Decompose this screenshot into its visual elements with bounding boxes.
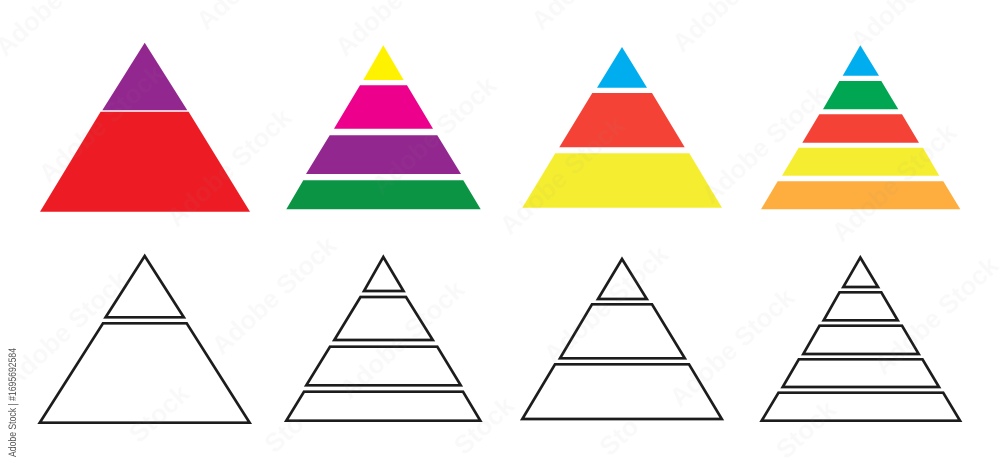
tier outline: first — [843, 258, 878, 287]
watermark pattern: Stock — [448, 390, 520, 461]
tier: purple — [102, 43, 187, 110]
watermark pattern: Adobe Stock — [826, 117, 963, 248]
watermark pattern: Stock — [123, 378, 195, 449]
tier: red — [40, 112, 250, 212]
tier: green — [823, 81, 898, 109]
tier: purple — [306, 135, 461, 174]
panel: colored pyramid, five tiers — [761, 45, 960, 209]
tier outline: second — [824, 292, 898, 320]
tier: orange — [761, 181, 960, 209]
tier: yellow — [522, 153, 722, 208]
watermark pattern: Adobe Stock — [538, 239, 675, 370]
watermark pattern: Adobe Stock — [334, 274, 471, 405]
stock image id caption: Adobe Stock | #1695692584 — [7, 348, 19, 457]
tier: red — [559, 93, 685, 147]
tier: blue — [843, 45, 879, 76]
watermark pattern: Sto — [258, 408, 309, 459]
watermark pattern: Sto — [593, 411, 644, 462]
panel: colored pyramid, two tiers — [40, 43, 250, 212]
tier: blue — [597, 47, 647, 88]
panel: colored pyramid, three tiers — [522, 47, 722, 208]
panel: outline pyramid, five tiers — [762, 258, 960, 421]
tier: magenta — [334, 85, 433, 129]
watermark pattern: Adobe Stock — [206, 230, 343, 361]
tier outline: second — [334, 297, 433, 340]
tier outline: bottom — [40, 323, 250, 423]
tier: yellow — [782, 148, 939, 176]
tier: green — [286, 180, 481, 209]
tier outline: fifth — [762, 393, 960, 421]
watermark pattern: Adobe Stock — [0, 264, 135, 395]
tier outline: third — [306, 347, 461, 385]
panel: outline pyramid, four tiers — [286, 257, 480, 421]
tier outline: third — [803, 326, 919, 354]
tier outline: fourth — [286, 392, 480, 421]
panel: colored pyramid, four tiers — [286, 45, 481, 209]
tier outline: middle — [560, 304, 685, 358]
watermark pattern: Adobe Stock — [161, 102, 298, 233]
watermark pattern: Adobe Stock — [696, 79, 833, 210]
tier outline: bottom — [522, 364, 722, 419]
watermark pattern: Adobe Stock — [366, 70, 503, 201]
panel: outline pyramid, three tiers — [522, 259, 722, 419]
tier: yellow — [363, 45, 404, 80]
watermark pattern: Stock — [770, 394, 842, 465]
tier outline: first — [364, 257, 404, 291]
tier outline: top — [598, 259, 647, 299]
tier: red — [802, 114, 919, 143]
tier outline: fourth — [783, 359, 939, 387]
watermark pattern: Adobe Stock — [664, 282, 801, 413]
watermark pattern: Adobe Stock — [33, 58, 170, 189]
panel: outline pyramid, two tiers — [40, 256, 250, 423]
tier outline: top — [106, 256, 184, 317]
watermark pattern: Adobe Stock — [494, 110, 631, 241]
